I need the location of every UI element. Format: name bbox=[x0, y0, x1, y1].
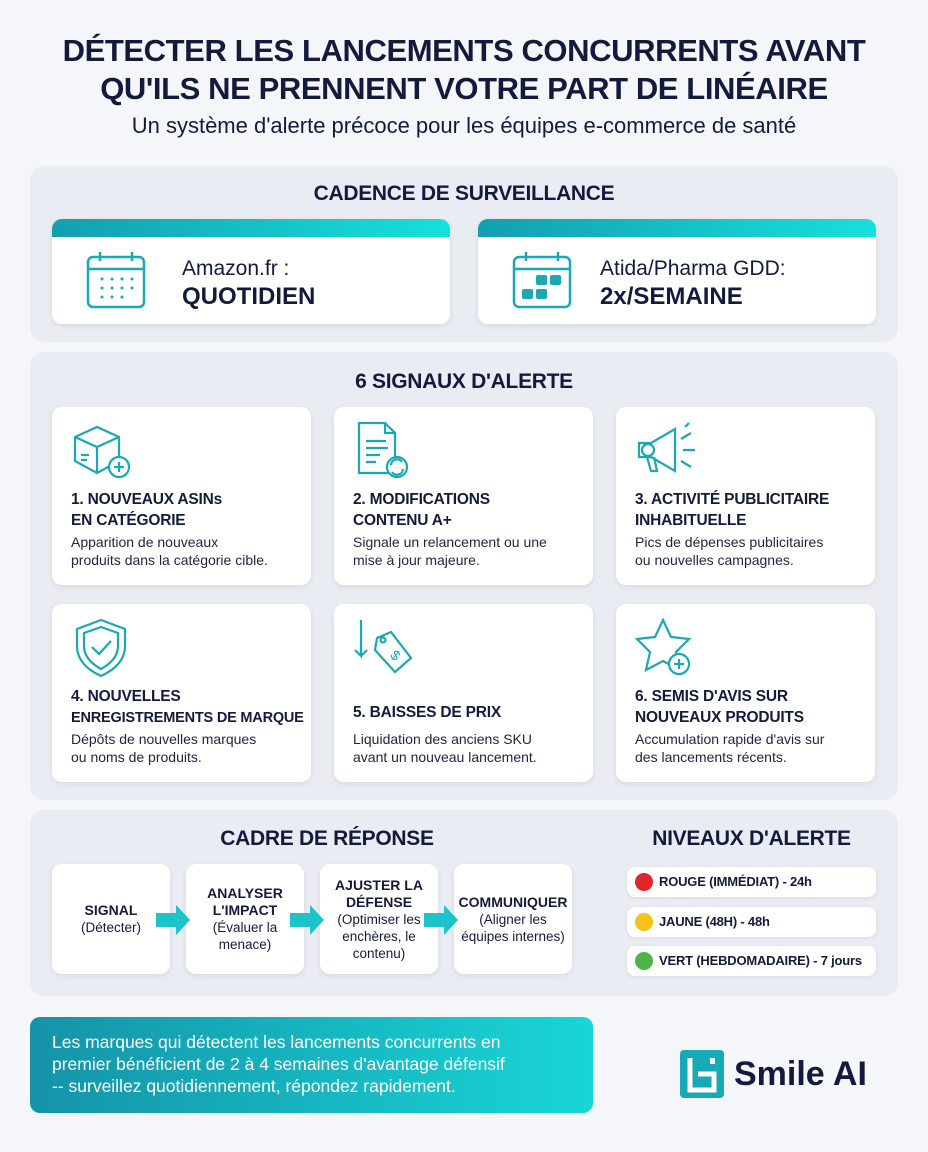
icon: logo mark bbox=[680, 1050, 724, 1098]
callout banner: premier bénéficient de 2 à 4 semaines d'avantage défensif bbox=[52, 1054, 505, 1074]
heading: alert levels: NIVEAUX D'ALERTE bbox=[652, 827, 851, 850]
signal 3: INHABITUELLE bbox=[635, 512, 746, 529]
signal 2: Signale un relancement ou une bbox=[353, 534, 547, 550]
callout banner: -- surveillez quotidiennement, répondez rapidement. bbox=[52, 1076, 456, 1096]
signal 1: EN CATÉGORIE bbox=[71, 512, 185, 529]
card: atida bbox=[478, 219, 876, 324]
icon: box bbox=[74, 426, 130, 478]
step 3: DÉFENSE bbox=[346, 894, 412, 910]
card: amazon: QUOTIDIEN bbox=[182, 283, 315, 310]
step 2: (Évaluer la bbox=[213, 920, 277, 935]
card: atida: 2x/SEMAINE bbox=[600, 283, 743, 310]
icon: price tag down bbox=[354, 620, 412, 674]
panel: signals bbox=[30, 352, 898, 800]
signal 2 bbox=[334, 407, 593, 585]
signal 5: avant un nouveau lancement. bbox=[353, 749, 537, 765]
signal 1 bbox=[52, 407, 311, 585]
signal 3: ou nouvelles campagnes. bbox=[635, 552, 794, 568]
signal 3: Pics de dépenses publicitaires bbox=[635, 534, 823, 550]
step 4: (Aligner les bbox=[479, 912, 547, 926]
signal 4: ENREGISTREMENTS DE MARQUE bbox=[71, 710, 304, 726]
panel: cadence bbox=[30, 166, 898, 342]
signal 6: des lancements récents. bbox=[635, 749, 787, 765]
signal 5: Liquidation des anciens SKU bbox=[353, 731, 532, 747]
alert green bbox=[627, 946, 876, 976]
logo bbox=[680, 1050, 867, 1098]
alert yellow bbox=[627, 907, 876, 937]
callout banner bbox=[30, 1017, 593, 1113]
signal 6 bbox=[616, 604, 875, 782]
panel: response bbox=[30, 810, 898, 996]
step 3: enchères, le bbox=[342, 928, 416, 944]
icon: document refresh bbox=[358, 422, 408, 478]
arrow 2 bbox=[290, 905, 324, 935]
title bbox=[63, 33, 866, 106]
step 4: équipes internes) bbox=[461, 928, 565, 944]
icon: calendar blocks bbox=[512, 252, 572, 308]
alert red bbox=[627, 867, 876, 897]
signal 1: 1. NOUVEAUX ASINs bbox=[71, 491, 222, 508]
step 2 bbox=[186, 864, 304, 974]
title: QU'ILS NE PRENNENT VOTRE PART DE LINÉAIRE bbox=[100, 71, 828, 106]
step 4: COMMUNIQUER bbox=[459, 894, 567, 910]
card: amazon bbox=[52, 219, 450, 324]
icon: calendar bbox=[86, 252, 146, 308]
signal 3 bbox=[616, 407, 875, 585]
arrow 1 bbox=[156, 905, 190, 935]
signal 4 bbox=[52, 604, 311, 782]
alert red: ROUGE (IMMÉDIAT) - 24h bbox=[659, 874, 812, 889]
signal 2: 2. MODIFICATIONS bbox=[353, 491, 490, 508]
signal 4: Dépôts de nouvelles marques bbox=[71, 731, 256, 747]
signal 4: 4. NOUVELLES bbox=[71, 688, 181, 705]
signal 4: ou noms de produits. bbox=[71, 749, 202, 765]
signal 1: produits dans la catégorie cible. bbox=[71, 552, 268, 568]
title: DÉTECTER LES LANCEMENTS CONCURRENTS AVANT bbox=[63, 33, 865, 68]
card: amazon: Amazon.fr : bbox=[182, 257, 289, 280]
arrow 3 bbox=[424, 905, 458, 935]
step 2: ANALYSER bbox=[207, 885, 283, 901]
heading: cadence: CADENCE DE SURVEILLANCE bbox=[314, 182, 614, 205]
signal 6: 6. SEMIS D'AVIS SUR bbox=[635, 688, 788, 705]
step 3: AJUSTER LA bbox=[335, 876, 423, 892]
alert green: VERT (HEBDOMADAIRE) - 7 jours bbox=[659, 953, 862, 968]
heading: response: CADRE DE RÉPONSE bbox=[220, 827, 434, 850]
step 2: L'IMPACT bbox=[213, 902, 277, 918]
logo: Smile AI bbox=[734, 1055, 867, 1093]
card: atida: Atida/Pharma GDD: bbox=[600, 257, 786, 280]
icon: star plus bbox=[634, 618, 692, 676]
subtitle: Un système d'alerte précoce pour les équipes e-commerce de santé bbox=[132, 113, 796, 138]
step 4 bbox=[454, 864, 572, 974]
step 3 bbox=[320, 864, 438, 974]
signal 2: CONTENU A+ bbox=[353, 512, 452, 529]
signal 2: mise à jour majeure. bbox=[353, 552, 480, 568]
signal 6: NOUVEAUX PRODUITS bbox=[635, 709, 804, 726]
step 1 bbox=[52, 864, 170, 974]
step 2: menace) bbox=[219, 937, 271, 952]
signal 5 bbox=[334, 604, 593, 782]
callout banner: Les marques qui détectent les lancements concurrents en bbox=[52, 1032, 500, 1052]
signal 5: 5. BAISSES DE PRIX bbox=[353, 704, 501, 721]
signal 1: Apparition de nouveaux bbox=[71, 534, 218, 550]
signal 6: Accumulation rapide d'avis sur bbox=[635, 731, 824, 747]
icon: price tag down: $ bbox=[387, 647, 404, 664]
step 3: contenu) bbox=[353, 946, 405, 960]
step 1: SIGNAL bbox=[85, 902, 137, 918]
heading: signals: 6 SIGNAUX D'ALERTE bbox=[355, 370, 573, 393]
signal 3: 3. ACTIVITÉ PUBLICITAIRE bbox=[635, 491, 829, 508]
step 3: (Optimiser les bbox=[337, 912, 421, 926]
icon: shield bbox=[76, 618, 126, 678]
icon: megaphone bbox=[638, 422, 695, 473]
step 1: (Détecter) bbox=[81, 920, 141, 935]
alert yellow: JAUNE (48H) - 48h bbox=[659, 914, 770, 929]
